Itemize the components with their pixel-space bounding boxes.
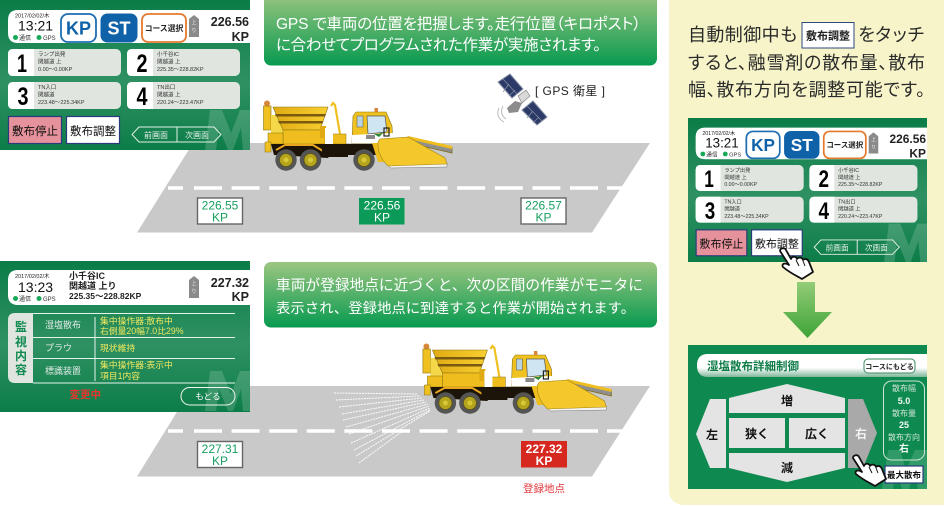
course card 4: TN出口 xyxy=(838,197,856,205)
course card 4 xyxy=(127,82,240,111)
course card 1 xyxy=(696,165,804,193)
monitoring table: プラウ xyxy=(45,343,72,353)
status bar: 小千谷IC xyxy=(69,270,106,281)
status: changing: 変更中 xyxy=(70,388,101,401)
course card 2 xyxy=(127,49,240,78)
navigation: previous and next screen: 前画面 xyxy=(826,242,849,252)
course card 3: 223.48〜225.34KP xyxy=(724,214,769,220)
course card 1: 関越道 上 xyxy=(724,173,747,181)
course card 2: 225.35〜228.82KP xyxy=(157,67,204,73)
status bar: 13:23 xyxy=(18,279,53,295)
status readout xyxy=(884,381,924,460)
course card 3: TN入口 xyxy=(38,84,56,91)
kilopost sign 226.56 current: 226.56 xyxy=(364,198,401,212)
kilopost sign 226.55: KP xyxy=(212,210,228,224)
course card 2: 関越道 上 xyxy=(157,58,181,66)
course card 2: 小千谷IC xyxy=(157,50,179,58)
status bar: KP xyxy=(232,30,249,44)
status readout: 25 xyxy=(899,420,909,430)
status bar: 上 xyxy=(871,136,876,143)
title bar: 湿塩散布詳細制御 xyxy=(707,359,799,373)
status bar: 関越道 上り xyxy=(69,280,117,291)
course card 1: 1 xyxy=(17,50,27,78)
kilopost sign 226.56 current: KP xyxy=(374,210,390,224)
status bar xyxy=(8,10,250,44)
course card 2: 関越道 上 xyxy=(838,173,861,181)
status bar: 226.56 xyxy=(890,132,926,146)
status bar: 通信 xyxy=(706,150,718,158)
button: right: 右 xyxy=(855,426,867,441)
callout: work display at registered point: 車両が登録地点に近づくと、次の区間の作業がモニタに xyxy=(276,277,643,294)
status bar: 227.32 xyxy=(211,276,249,290)
panel: spray detail control xyxy=(688,345,927,489)
course card 3: 関越道 xyxy=(38,90,55,98)
kilopost sign 227.31 xyxy=(198,442,242,468)
button: left xyxy=(696,399,726,468)
navigation: previous and next screen: 次画面 xyxy=(185,130,209,140)
kilopost sign 227.31: 227.31 xyxy=(202,442,239,456)
course card 4: TN出口 xyxy=(157,83,175,91)
icon: GPS satellite xyxy=(498,74,547,125)
course card 3: TN入口 xyxy=(724,198,742,205)
status bar: GPS xyxy=(43,36,56,42)
callout: GPS positioning: に合わせてプログラムされた作業が実施されます。 xyxy=(276,36,601,54)
button: decrease: 減 xyxy=(781,460,793,475)
button: stop spreading: 敷布停止 xyxy=(12,124,58,138)
callout: GPS positioning xyxy=(264,0,657,66)
monitoring table: 項目1内容 xyxy=(100,370,140,381)
title bar xyxy=(697,354,927,377)
label: GPS satellite: [ GPS 衛星 ] xyxy=(535,84,605,98)
navigation: previous and next screen xyxy=(814,240,899,254)
status bar: 13:21 xyxy=(705,135,739,150)
callout: work display at registered point: 表示され、登録地点に到達すると作業が開始されます。 xyxy=(276,300,635,317)
button: wide: 広く xyxy=(805,427,829,441)
kilopost sign 226.57 xyxy=(521,198,566,224)
course card 3: 関越道 xyxy=(724,205,741,213)
status bar: 13:21 xyxy=(18,18,53,34)
callout: GPS positioning: GPS で車両の位置を把握します。走行位置（キロポスト） xyxy=(276,15,641,33)
monitoring table: 右側量20幅7.0比29% xyxy=(100,325,184,336)
truck: upper scene xyxy=(264,100,452,171)
kilopost sign 226.55: 226.55 xyxy=(202,198,239,212)
monitoring table: 視 xyxy=(15,335,27,349)
monitoring table xyxy=(8,313,235,383)
status bar: 2017/02/02/木 xyxy=(702,129,736,137)
status bar xyxy=(8,270,250,305)
button: increase xyxy=(729,384,845,413)
status bar: 通信 xyxy=(19,34,31,42)
status bar: 2017/02/02/木 xyxy=(15,12,50,20)
course card 1: 0.00〜0.00KP xyxy=(724,182,757,188)
button: left: 左 xyxy=(706,427,718,442)
status bar: 225.35〜228.82KP xyxy=(69,291,142,301)
status bar: 226.56 xyxy=(211,15,249,29)
status bar: 上 xyxy=(191,19,197,26)
course card 2: 小千谷IC xyxy=(838,166,859,174)
button: narrow xyxy=(729,418,785,448)
course card 1: 関越道 上 xyxy=(38,58,62,66)
navigation: previous and next screen: 前画面 xyxy=(144,130,168,140)
button: stop spreading: 敷布停止 xyxy=(700,237,743,251)
status bar: KP xyxy=(751,135,775,155)
text: adjustment explanation: 幅、散布方向を調整可能です。 xyxy=(688,80,925,100)
kilopost sign 227.31: KP xyxy=(212,454,228,468)
panel: pale yellow adjustment background xyxy=(669,0,944,505)
navigation: previous and next screen: 次画面 xyxy=(865,242,888,252)
course card 2 xyxy=(809,165,917,193)
status readout: 散布幅 xyxy=(892,383,916,393)
button: stop spreading xyxy=(696,230,747,256)
snow melting agent spray xyxy=(334,393,430,463)
course card 3 xyxy=(696,197,804,225)
icon: hand touching adjust button xyxy=(780,248,813,279)
monitoring table: 現状維持 xyxy=(100,342,135,353)
status readout: 5.0 xyxy=(898,396,910,406)
status readout: 散布方向 xyxy=(888,432,920,442)
button: maximum spreading xyxy=(885,466,923,483)
status readout: 散布量 xyxy=(892,408,916,418)
button: increase: 増 xyxy=(781,393,793,408)
status bar: コース選択 xyxy=(145,23,183,33)
status readout: 右 xyxy=(899,442,909,455)
button: adjust spreading: 敷布調整 xyxy=(70,124,116,138)
button: narrow: 狭く xyxy=(745,426,769,441)
course card 4: 4 xyxy=(818,198,830,225)
course card 4 xyxy=(809,197,917,225)
status bar: り xyxy=(191,289,197,295)
panel: course selection monitor xyxy=(0,0,250,150)
button: stop spreading xyxy=(8,116,62,144)
course card 3: 223.48〜225.34KP xyxy=(38,100,85,106)
button: adjust spreading: 敷布調整 xyxy=(755,237,799,251)
icon: hand touching right button xyxy=(853,455,886,486)
button: right xyxy=(848,399,877,468)
status bar: コース選択 xyxy=(826,140,864,150)
label: registered point: 登録地点 xyxy=(523,482,565,495)
course card 1: 1 xyxy=(704,166,714,193)
monitoring table: 集中操作器:表示中 xyxy=(100,359,173,370)
title bar: コースにもどる xyxy=(865,362,914,371)
monitoring table: 湿塩散布 xyxy=(45,319,81,330)
button: back xyxy=(181,388,235,405)
status bar: 上 xyxy=(191,280,197,287)
kilopost sign 227.32 registered point xyxy=(521,441,567,468)
status bar: GPS xyxy=(729,152,741,158)
button: maximum spreading: 最大散布 xyxy=(887,470,921,480)
status bar: 2017/02/02/木 xyxy=(15,272,50,280)
callout: work display at registered point xyxy=(264,262,657,328)
panel: monitoring detail monitor xyxy=(0,261,250,412)
course card 3 xyxy=(8,82,121,111)
kilopost sign 226.57: KP xyxy=(535,210,552,224)
course card 1: ランプ出発 xyxy=(38,50,66,58)
monitoring table: 容 xyxy=(15,362,27,377)
status bar: GPS xyxy=(43,297,56,303)
panel: course selection monitor with touch xyxy=(688,118,927,262)
status bar: り xyxy=(191,28,197,34)
status bar xyxy=(696,128,927,160)
status bar: ST xyxy=(107,18,131,38)
monitoring table: 標識装置 xyxy=(45,365,81,376)
truck: lower scene xyxy=(423,344,611,414)
status bar: KP xyxy=(66,18,91,38)
navigation: previous and next screen xyxy=(132,127,221,142)
kilopost sign 226.56 current xyxy=(359,198,404,224)
monitoring table: 内 xyxy=(15,348,27,363)
road: lower scene xyxy=(137,386,650,476)
kilopost sign 226.57: 226.57 xyxy=(525,198,562,212)
status bar: KP xyxy=(909,146,926,160)
text: adjustment explanation xyxy=(688,22,925,100)
button: decrease xyxy=(729,453,845,482)
course card 4: 関越道 上 xyxy=(838,205,861,213)
status bar: ST xyxy=(791,135,813,155)
text: adjustment explanation: すると、融雪剤の散布量、散布 xyxy=(688,53,925,73)
course card 2: 2 xyxy=(818,166,829,193)
kilopost sign 226.55 xyxy=(198,198,242,224)
course card 1: 0.00〜0.00KP xyxy=(38,67,73,73)
button: wide xyxy=(789,418,845,448)
course card 4: 4 xyxy=(136,83,148,111)
course card 3: 3 xyxy=(705,198,715,225)
course card 3: 3 xyxy=(18,83,28,111)
status bar: 通信 xyxy=(19,295,31,303)
course card 4: 220.24〜223.47KP xyxy=(157,100,204,106)
course card 4: 220.24〜223.47KP xyxy=(838,214,883,220)
text: adjustment explanation: 敷布調整 xyxy=(806,28,850,42)
button: adjust spreading xyxy=(752,230,802,256)
text: adjustment explanation: 自動制御中も xyxy=(688,25,798,45)
monitoring table: 監 xyxy=(15,319,27,334)
course card 4: 関越道 上 xyxy=(157,90,181,98)
arrow: down to detail control xyxy=(783,282,832,338)
course card 1 xyxy=(8,49,121,78)
text: adjustment explanation: をタッチ xyxy=(858,25,925,45)
course card 1: ランプ出発 xyxy=(724,166,751,174)
monitoring table: 集中操作器:散布中 xyxy=(100,315,173,326)
kilopost sign 227.32 registered point: KP xyxy=(536,454,552,468)
course card 2: 225.35〜228.82KP xyxy=(838,182,883,188)
button: back: もどる xyxy=(195,392,221,402)
road: upper scene xyxy=(137,143,650,232)
button: adjust spreading xyxy=(66,116,120,144)
kilopost sign 227.32 registered point: 227.32 xyxy=(526,442,563,456)
course card 2: 2 xyxy=(136,50,148,78)
status bar: り xyxy=(871,145,876,151)
status bar: KP xyxy=(232,290,249,304)
